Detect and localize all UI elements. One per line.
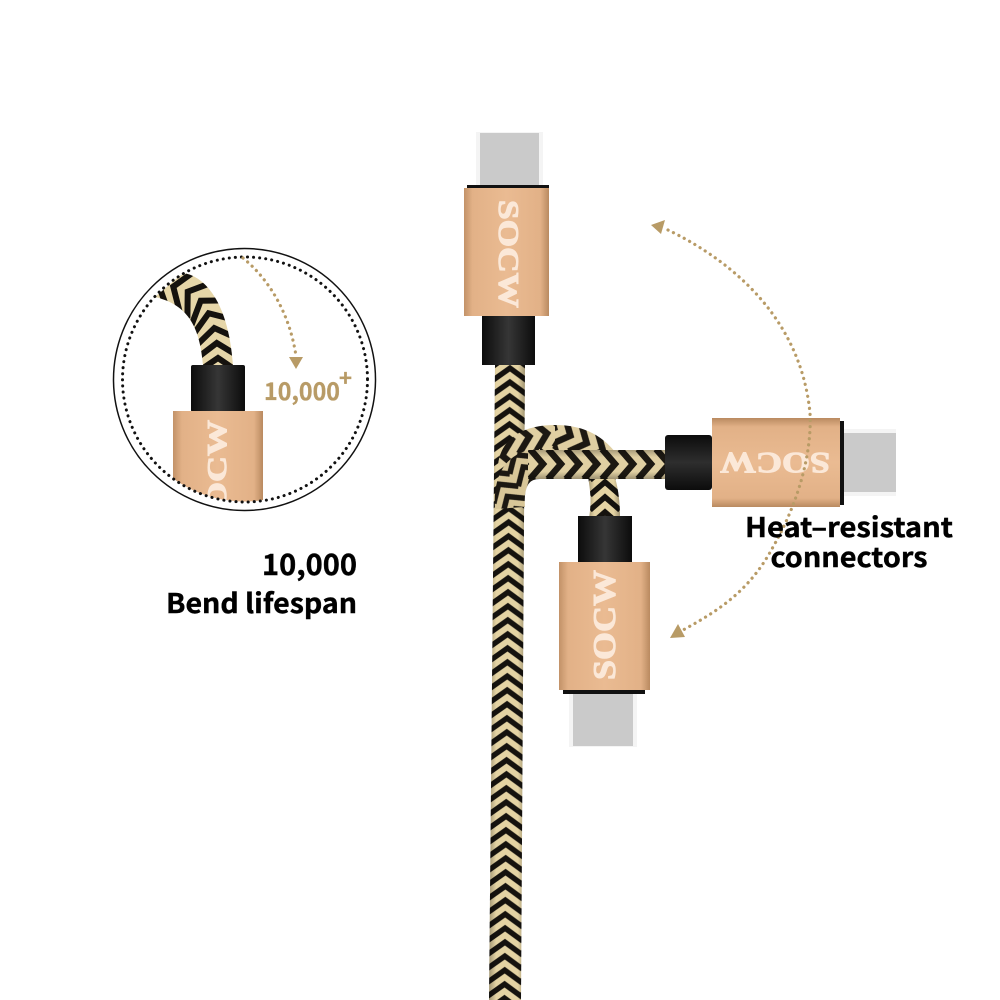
outer ring xyxy=(114,248,376,510)
metal plug top xyxy=(476,132,543,185)
detail circle: bend lifespan xyxy=(114,248,376,530)
heading: bend lifespan: Bend lifespan xyxy=(166,582,357,621)
plus sign: + xyxy=(339,361,352,393)
collar top xyxy=(482,316,535,365)
zoomed cable and connector xyxy=(156,273,263,502)
count label: 10,000 xyxy=(264,372,340,407)
dotted inner ring xyxy=(122,257,368,502)
connector: lower xyxy=(559,516,650,747)
collar xyxy=(191,365,245,412)
logo lower: SOCW xyxy=(586,570,622,680)
braided cable: small branch to lower connector xyxy=(588,474,620,518)
heading: 10,000: 10,000 xyxy=(262,542,357,584)
collar lower xyxy=(578,516,632,562)
connector: top xyxy=(464,132,549,365)
braided cable: junction bend xyxy=(510,464,540,508)
gold housing right xyxy=(712,418,840,507)
metal plug lower xyxy=(569,693,637,747)
curved bend arrow xyxy=(243,258,296,356)
gold housing xyxy=(173,411,263,511)
curved braided cable xyxy=(156,273,233,365)
metal plug right xyxy=(843,429,896,496)
logo right: SOCW xyxy=(720,446,830,479)
braided cable: horizontal run to right connector xyxy=(528,450,666,479)
heading: connectors line: connectors xyxy=(770,536,928,575)
gold housing lower xyxy=(559,562,650,690)
braided cable: main vertical xyxy=(489,365,525,1000)
collar right xyxy=(665,435,712,490)
connector: right xyxy=(665,418,896,507)
braided cable: upper loop xyxy=(512,439,608,466)
heading: heat-resistant connectors: Heat–resistant xyxy=(745,506,953,545)
logo: SOCW xyxy=(202,420,232,530)
gold housing top xyxy=(464,188,549,316)
dotted rotation arrow xyxy=(651,220,810,638)
logo top: SOCW xyxy=(492,200,524,308)
